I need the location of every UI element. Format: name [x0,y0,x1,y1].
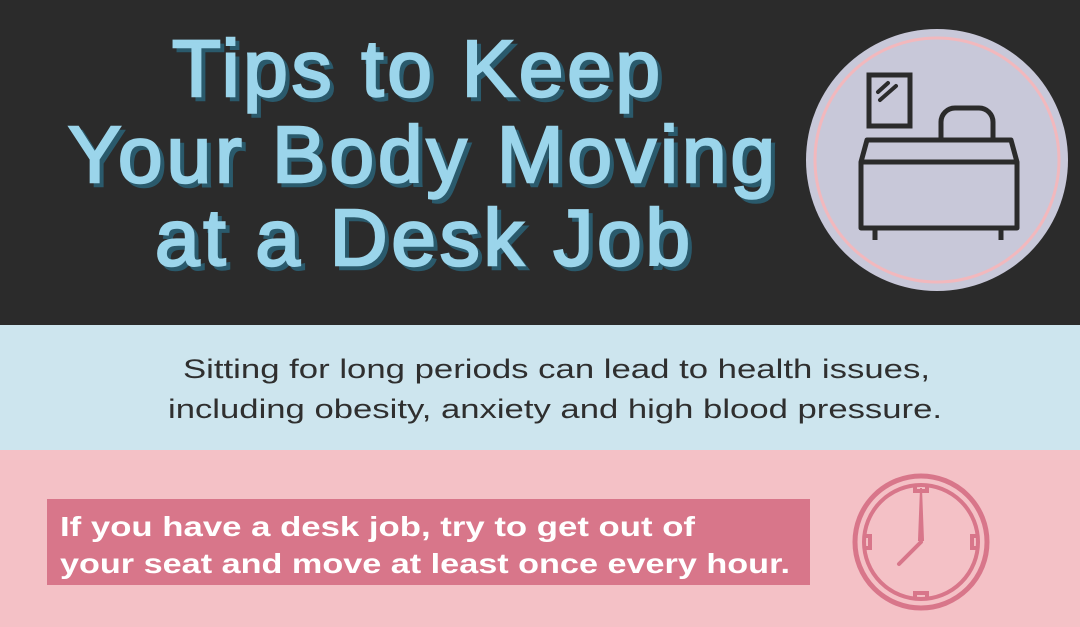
title: at a Desk Job [159,197,694,286]
title [68,24,779,286]
title: at a Desk Job [155,193,690,282]
callout: tip [47,499,810,585]
subtitle text: Sitting for long periods can lead to health issues, [183,354,930,384]
subtitle text: including obesity, anxiety and high blood pressure. [168,394,942,424]
callout: tip: your seat and move at least once every hour. [60,548,790,579]
title: Your Body Moving [72,114,779,203]
tip band [0,450,1080,627]
title: Tips to Keep [172,24,660,113]
icon: desk [806,29,1068,291]
icon: clock [855,476,987,608]
title: Your Body Moving [68,110,775,199]
header band [0,0,1080,325]
subtitle band [0,325,1080,450]
title: Tips to Keep [176,28,664,117]
subtitle text [168,354,942,424]
callout: tip: If you have a desk job, try to get out of [60,511,696,542]
